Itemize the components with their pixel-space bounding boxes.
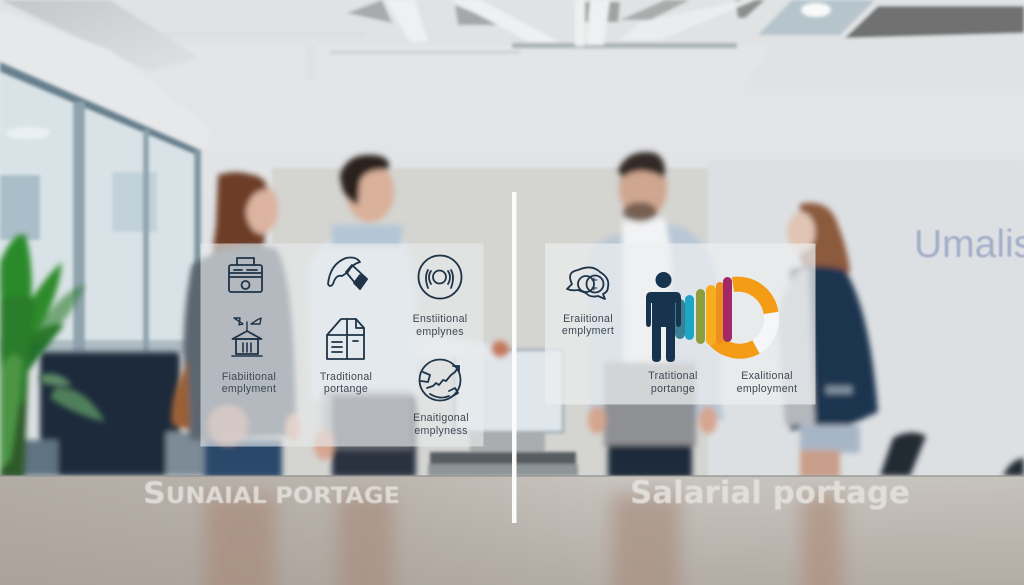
label: Exalitional	[741, 370, 793, 382]
label: Tratitional	[648, 370, 698, 382]
icon: circular growth arrow	[420, 360, 460, 400]
back wall panels	[272, 160, 1024, 480]
label	[413, 313, 467, 338]
ceiling beams and vents	[0, 0, 1024, 150]
title: right: Salarial portage	[630, 475, 910, 511]
label	[320, 371, 372, 395]
label: emplymert	[562, 325, 614, 337]
label: Enstiitional	[413, 313, 467, 325]
monitor on table	[428, 350, 578, 476]
label: Fiabiitional	[222, 371, 276, 383]
panel: left icon grid	[200, 244, 484, 446]
chairs right	[880, 432, 1024, 476]
sofa	[18, 352, 206, 476]
label: emplynes	[416, 326, 464, 338]
label	[737, 370, 797, 395]
icon: hammer	[328, 258, 367, 289]
chart: donut and bars	[675, 277, 771, 351]
icon: person	[646, 272, 681, 362]
label	[648, 370, 698, 395]
icon: circle with hands	[418, 256, 462, 298]
label	[222, 371, 276, 395]
person: woman left	[171, 172, 300, 478]
label: emplyness	[414, 425, 468, 437]
label: Enaitigonal	[413, 412, 469, 424]
conference table	[0, 475, 1024, 585]
icon: house with arrows	[232, 318, 262, 356]
panel: right chart	[545, 244, 816, 404]
label: employment	[737, 383, 797, 395]
colour bars	[675, 277, 732, 345]
plant	[0, 234, 105, 478]
label	[562, 313, 614, 337]
label	[413, 412, 469, 437]
person: woman right	[778, 203, 878, 478]
icon: document box	[327, 319, 364, 359]
label: portange	[324, 383, 368, 395]
label: portange	[651, 383, 695, 395]
label: Traditional	[320, 371, 372, 383]
donut ring	[714, 284, 771, 351]
icon: chat bubbles	[567, 267, 608, 299]
person: man right	[588, 152, 725, 478]
icon: briefcase	[229, 258, 262, 292]
title: left: SUNAIAL PORTAGE	[143, 476, 400, 510]
centre divider line	[512, 192, 516, 523]
label: emplyment	[222, 383, 276, 395]
window	[0, 62, 201, 354]
label: Eraiitional	[563, 313, 613, 325]
person: man left	[308, 155, 509, 477]
